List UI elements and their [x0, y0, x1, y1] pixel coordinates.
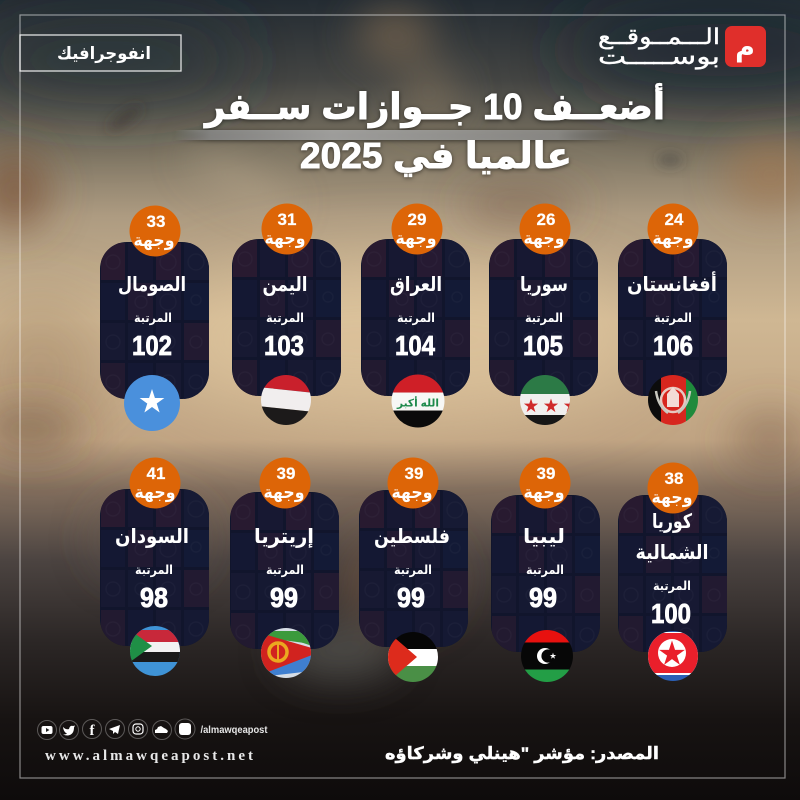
card: Afghanistan: المرتبة — [654, 311, 692, 325]
card: Libya: وجهة — [524, 483, 564, 503]
card: Sudan: 41 — [147, 464, 165, 483]
social icons — [38, 719, 195, 740]
card: Syria: وجهة — [524, 229, 564, 249]
logo: Al-Mawqea Post: الـــمــوقــع — [598, 24, 720, 49]
card: Palestine: وجهة — [392, 483, 432, 503]
card: Yemen: المرتبة — [266, 311, 304, 325]
card: Sudan — [100, 458, 209, 676]
flag: Yemen — [261, 375, 311, 425]
card: Syria — [489, 204, 598, 426]
card: Iraq: المرتبة — [397, 311, 435, 325]
flag: Afghanistan — [648, 375, 698, 425]
title: عالميا في 2025 — [300, 135, 572, 177]
flag: Sudan — [130, 626, 180, 676]
title: أضعــف 10 جــوازات ســفر — [203, 83, 665, 128]
card: Somalia: 33 — [147, 212, 165, 231]
card: Libya: 99 — [529, 582, 557, 613]
social handle: /almawqeapost — [200, 725, 268, 736]
card: Yemen: اليمن — [262, 274, 308, 296]
category label: infographic — [20, 35, 181, 71]
card: Sudan: 98 — [140, 582, 168, 613]
card: North Korea: 100 — [651, 598, 691, 629]
flag: Libya — [520, 629, 574, 683]
card: Libya: المرتبة — [526, 563, 564, 577]
card: North Korea: وجهة — [652, 488, 692, 508]
card: Syria: 26 — [537, 210, 555, 229]
website URL: www.almawqeapost.net — [45, 748, 253, 764]
card: North Korea: 38 — [665, 469, 683, 488]
flag: Syria — [520, 375, 570, 425]
logo: Al-Mawqea Post — [598, 24, 766, 69]
card: Syria: سوريا — [520, 274, 568, 296]
logo: Al-Mawqea Post: بوســـــت — [598, 44, 720, 69]
card: Iraq: العراق — [390, 274, 442, 296]
title — [175, 83, 665, 177]
card: Eritrea — [230, 458, 339, 679]
card: Eritrea: وجهة — [264, 483, 304, 503]
card: Libya: ليبيا — [523, 526, 565, 548]
card: Syria: 105 — [523, 330, 563, 361]
card: Palestine: 99 — [397, 582, 425, 613]
card: Afghanistan — [618, 204, 727, 425]
card: Somalia — [100, 206, 209, 431]
card: Syria: المرتبة — [525, 311, 563, 325]
card: Eritrea: إريتريا — [254, 526, 314, 548]
flag: Somalia — [124, 375, 180, 431]
flag: North Korea — [648, 631, 698, 681]
card: Yemen: 103 — [264, 330, 304, 361]
card: North Korea — [618, 462, 727, 681]
card: Sudan: السودان — [115, 526, 189, 548]
card: Afghanistan: 24 — [665, 210, 684, 229]
card: Eritrea: المرتبة — [266, 563, 304, 577]
card: Libya: 39 — [537, 464, 555, 483]
card: Iraq: 104 — [395, 330, 435, 361]
card: Palestine — [359, 458, 468, 682]
source line: المصدر: مؤشر "هينلي وشركاؤه — [385, 744, 659, 764]
card: Somalia: الصومال — [118, 274, 186, 296]
card: Iraq — [361, 204, 470, 429]
card: North Korea: الشمالية — [636, 542, 708, 564]
social icons: f — [90, 723, 96, 739]
card: Somalia: المرتبة — [134, 311, 172, 325]
card: Somalia: وجهة — [134, 231, 174, 251]
card: Eritrea: 99 — [270, 582, 298, 613]
card: Afghanistan: أفغانستان — [627, 270, 717, 296]
flag: Iraq: الله أكبر — [396, 395, 439, 409]
flag: Iraq — [390, 373, 446, 429]
card: Afghanistan: 106 — [653, 330, 693, 361]
card: Iraq: 29 — [408, 210, 426, 229]
card: Palestine: فلسطين — [374, 526, 450, 548]
card: Libya — [491, 458, 600, 683]
card: Palestine: المرتبة — [394, 563, 432, 577]
card: Yemen: وجهة — [264, 229, 306, 249]
card: Yemen: 31 — [278, 210, 296, 229]
flag: Eritrea — [260, 627, 312, 679]
card: Yemen — [232, 204, 341, 434]
card: Iraq: وجهة — [396, 229, 436, 249]
card: Afghanistan: وجهة — [652, 229, 694, 249]
logo: Al-Mawqea Post: م — [735, 32, 755, 63]
card: Eritrea: 39 — [277, 464, 295, 483]
card: Palestine: 39 — [405, 464, 423, 483]
card: North Korea: المرتبة — [653, 579, 691, 593]
card: North Korea: كوريا — [652, 511, 692, 533]
card: Sudan: المرتبة — [135, 563, 173, 577]
category label: infographic: انفوجرافيك — [57, 44, 151, 64]
card: Sudan: وجهة — [134, 483, 176, 503]
flag: Palestine — [388, 632, 438, 682]
card: Somalia: 102 — [132, 330, 172, 361]
